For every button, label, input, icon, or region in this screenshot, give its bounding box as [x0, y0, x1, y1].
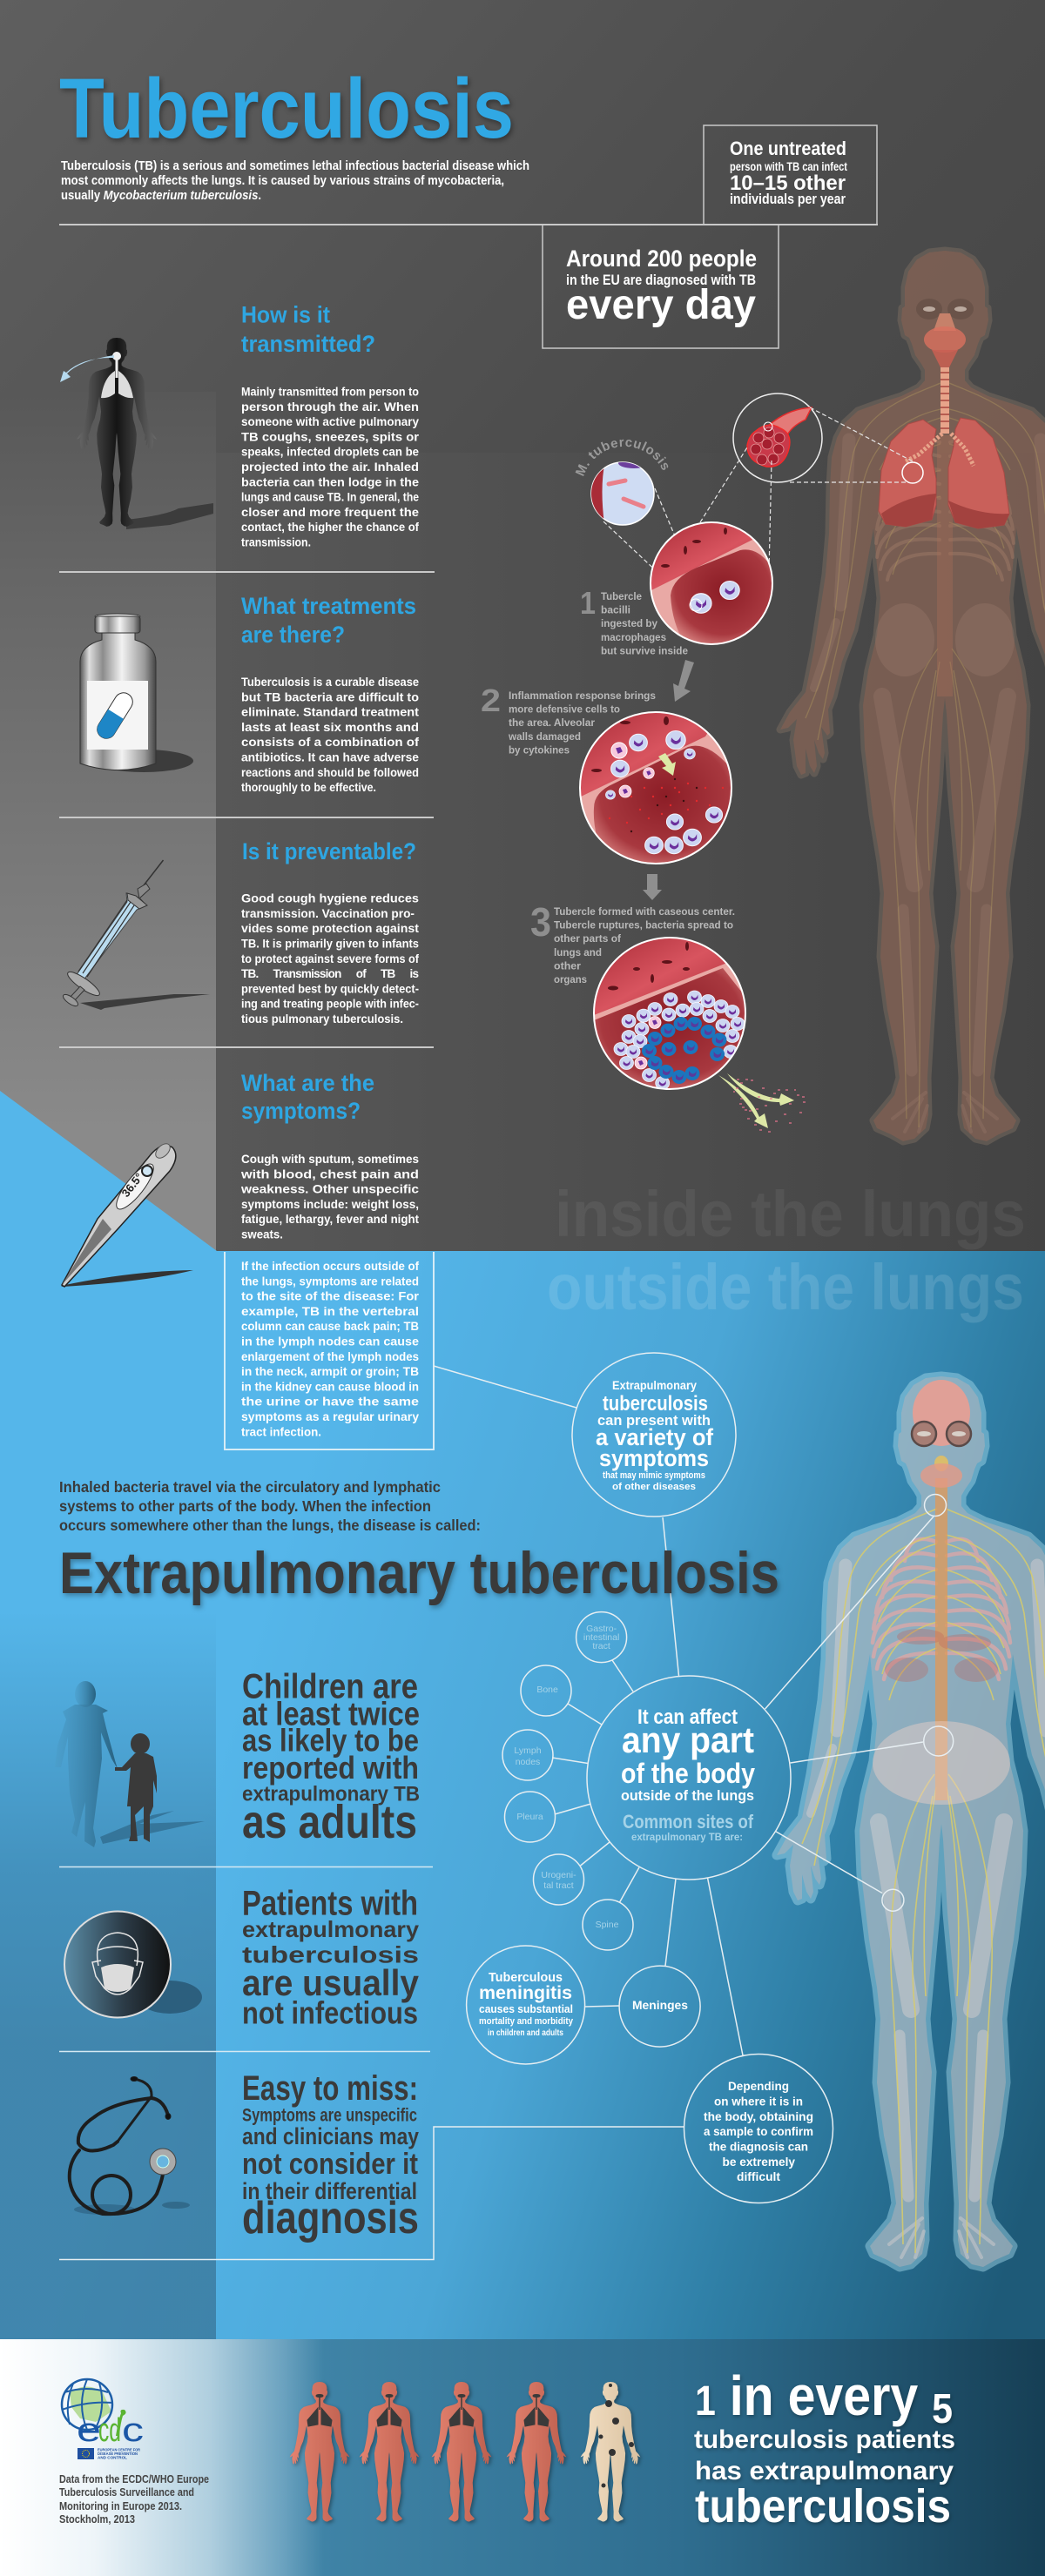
text: easy to miss: and clinicians may	[242, 2123, 419, 2149]
heading: What are the symptoms: What are the	[241, 1070, 374, 1096]
callout: one untreated person	[704, 125, 877, 225]
text: transmission: someone with active pulmonary	[241, 415, 419, 428]
text: prevention	[241, 892, 420, 1026]
mouth	[920, 1463, 962, 1488]
spine	[935, 1478, 947, 1800]
site: gastro-intestinal tract	[576, 1612, 633, 1692]
step 2 illustration	[579, 710, 736, 871]
icon: mother and child	[55, 1681, 205, 1847]
text: prevention: prevented best by quickly detect-	[241, 982, 419, 995]
connector: symptoms to central circle	[663, 1517, 679, 1676]
text: inhaled bacteria: Inhaled bacteria travel via the circulatory and lymphatic	[59, 1478, 441, 1496]
marker: leg	[776, 1832, 904, 1911]
text: prevention: transmission. Vaccination pro-	[241, 907, 415, 920]
step 3 text: other	[554, 961, 582, 972]
text: pulmonary symptoms	[240, 1153, 420, 1241]
panel: extrapulmonary symptoms box: enlargement of the lymph nodes	[241, 1350, 419, 1363]
icon: face mask badge	[64, 1912, 202, 2018]
central circle: any part of the body	[587, 1676, 791, 1880]
step 2 text	[508, 691, 656, 756]
text: transmission: closer and more frequent the	[241, 506, 420, 519]
source text: Data from the ECDC/WHO Europe	[59, 2473, 209, 2485]
source text: Tuberculosis Surveillance and	[59, 2486, 194, 2499]
text: easy to miss: diagnosis	[242, 2193, 419, 2243]
site: urogenital tract: tal tract	[543, 1880, 574, 1891]
text: pulmonary symptoms: fatigue, lethargy, fever and night	[241, 1213, 419, 1226]
skeleton	[814, 440, 1045, 1132]
text: transmission: speaks, infected droplets can be	[241, 446, 419, 459]
step 2 text: Inflammation response brings	[509, 691, 656, 702]
text: prevention: ing and treating people with infec-	[241, 998, 419, 1011]
text: pulmonary symptoms: symptoms include: weight loss,	[241, 1198, 419, 1211]
step 1 number: 1	[580, 585, 596, 621]
text: 1 in every 5: has extrapulmonary	[695, 2457, 954, 2485]
text: pulmonary symptoms: Cough with sputum, sometimes	[241, 1153, 419, 1166]
site: urogenital tract	[533, 1842, 610, 1905]
trachea	[940, 367, 949, 434]
text: inhaled bacteria: occurs somewhere other than the lungs, the disease is called:	[59, 1517, 481, 1534]
panel: extrapulmonary symptoms box: tract infection.	[241, 1425, 321, 1438]
anatomical figure: lungs	[780, 251, 1045, 1141]
panel: extrapulmonary symptoms box: column can cause back pain; TB	[241, 1320, 419, 1333]
text: transmission: lungs and cause TB. In general, the	[241, 491, 419, 504]
nerves	[802, 1509, 1045, 2253]
text: easy to miss: Symptoms are unspecific	[242, 2106, 417, 2126]
step 1 text: macrophages	[601, 633, 666, 643]
source text	[59, 2473, 209, 2526]
callout circle: variety of symptoms: that may mimic symptoms	[603, 1470, 705, 1481]
skeleton	[811, 1565, 1045, 2257]
site: bone: Bone	[536, 1685, 558, 1695]
text: inhaled bacteria: systems to other parts of the body. When the infection	[59, 1497, 431, 1515]
heading: How is it transmitted	[241, 301, 375, 357]
callout circle: tuberculous meningitis: mortality and morbidity	[479, 2016, 574, 2027]
site: meninges	[619, 1879, 700, 2047]
intro text: Tuberculosis (TB) is a serious and sometimes lethal infectious bacterial disease which	[61, 159, 529, 173]
icon: stethoscope	[70, 2077, 190, 2215]
nerves	[806, 383, 1045, 1127]
text: prevention: Good cough hygiene reduces	[241, 892, 419, 905]
step 1 illustration	[649, 522, 775, 649]
site: pleura	[505, 1792, 591, 1842]
text: prevention: TB. Transmission of TB is	[241, 967, 419, 980]
text: children twice as likely: Children are	[242, 1668, 418, 1706]
text: transmission: contact, the higher the chance of	[241, 521, 419, 534]
background: dark right area of upper panel	[216, 453, 1045, 1252]
callout circle: tuberculous meningitis: in children and adults	[488, 2028, 563, 2038]
source text: Stockholm, 2013	[59, 2513, 135, 2526]
text: treatments: reactions and should be followed	[241, 766, 419, 779]
site: spine	[583, 1867, 639, 1950]
connector: rule under easy to miss, to difficulty circle	[59, 2127, 684, 2260]
arrows: bacteria spreading	[718, 1073, 794, 1128]
divider under intro	[59, 224, 878, 225]
heading: Extrapulmonary tuberculosis: Extrapulmonary tuberculosis	[59, 1540, 779, 1606]
panel: extrapulmonary symptoms box: symptoms as a regular urinary	[241, 1410, 419, 1423]
text: treatments: but TB bacteria are difficult to	[241, 690, 419, 703]
step 1 text: Tubercle	[601, 592, 642, 602]
logo: ECDC: AND CONTROL	[98, 2455, 127, 2460]
panel: extrapulmonary symptoms box: in the lymph nodes can cause	[241, 1335, 420, 1348]
figure tissue	[777, 1376, 1045, 2267]
site: meninges: Meninges	[632, 1998, 688, 2012]
heading: What treatments are there: are there?	[241, 622, 345, 648]
text: not infectious: not infectious	[242, 1995, 418, 2030]
callout circle: tuberculous meningitis: Tuberculous	[489, 1970, 563, 1985]
logo: ECDC: c	[122, 2412, 144, 2449]
step 1 text: but survive inside	[601, 646, 688, 656]
text: prevention: to protect against severe forms of	[241, 952, 419, 965]
text: prevention: tious pulmonary tuberculosis.	[241, 1012, 403, 1026]
background: lighter left column	[0, 392, 216, 1252]
site: gastro-intestinal tract: tract	[592, 1641, 610, 1651]
step 1 text: bacilli	[601, 606, 630, 616]
text: treatments: Tuberculosis is a curable disease	[241, 676, 419, 689]
pictogram: five body figures	[290, 2382, 640, 2522]
step 3 illustration	[592, 937, 749, 1097]
face detail	[916, 299, 974, 367]
anatomical figure: nervous system	[777, 1376, 1045, 2267]
step 2 text: walls damaged	[508, 732, 581, 743]
icon: thermometer: 36.5°	[119, 1171, 145, 1200]
figure tissue	[780, 251, 1045, 1141]
callout circle: tuberculous meningitis	[467, 1946, 619, 2064]
text: transmission: transmission.	[241, 536, 311, 548]
text: treatments: consists of a combination of	[241, 736, 420, 749]
text: not infectious: Patients with	[242, 1884, 418, 1922]
text: transmission	[241, 385, 420, 548]
background: footer band	[0, 2339, 1045, 2576]
heading: How is it transmitted: How is it	[241, 301, 330, 327]
text: easy to miss	[242, 2069, 419, 2243]
text: transmission: bacteria can then lodge in the	[241, 475, 420, 488]
left lung	[879, 420, 936, 527]
step 2 number: 2	[481, 683, 501, 718]
callout: one untreated person: One untreated	[730, 138, 846, 159]
ribs	[876, 440, 1014, 580]
ribs	[873, 1539, 1010, 1679]
text: transmission: TB coughs, sneezes, spits or	[241, 430, 420, 443]
text: inhaled bacteria	[59, 1478, 481, 1534]
callout: 200 people every day: Around 200 people	[566, 245, 757, 272]
callout: 200 people every day: in the EU are diagnosed with TB	[566, 272, 756, 288]
heading: Is it preventable: Is it preventable?	[242, 838, 416, 864]
text: children twice as likely: as adults	[242, 1796, 417, 1848]
callout circle: tuberculous meningitis: causes substantial	[479, 2002, 573, 2015]
step 3 text: organs	[554, 975, 587, 985]
nose	[934, 1456, 948, 1471]
site: lymph nodes: nodes	[516, 1757, 540, 1767]
step 3 text: Tubercle ruptures, bacteria spread to	[554, 921, 733, 932]
text: not infectious	[242, 1884, 420, 2030]
step 3 text: lungs and	[554, 948, 602, 958]
text: easy to miss: in their differential	[242, 2178, 417, 2204]
heading: What are the symptoms	[241, 1070, 374, 1124]
pelvis	[873, 1721, 1010, 1805]
panel: extrapulmonary symptoms box: example, TB in the vertebral	[241, 1305, 419, 1318]
marker: neck	[765, 1494, 946, 1709]
central circle: any part of the body: outside of the lungs	[621, 1787, 754, 1804]
panel: extrapulmonary symptoms box: in the neck, armpit or groin; TB	[241, 1365, 419, 1378]
panel: extrapulmonary symptoms box: in the kidney can cause blood in	[241, 1380, 419, 1393]
callout circle: diagnosis difficult: be extremely	[723, 2156, 795, 2169]
text: not infectious: are usually	[242, 1962, 420, 2003]
pictogram: dark lungs in four figures	[307, 2394, 549, 2426]
logo: ECDC: e	[77, 2412, 101, 2449]
text: not infectious: tuberculosis	[242, 1942, 419, 1968]
callout: 200 people every day	[543, 225, 779, 348]
text: not infectious: extrapulmonary	[242, 1916, 420, 1942]
logo: ECDC	[62, 2379, 144, 2460]
text: children twice as likely: reported with	[242, 1750, 419, 1786]
panel: extrapulmonary symptoms box: the lungs, symptoms are related	[241, 1275, 419, 1288]
callout circle: variety of symptoms: can present with	[597, 1412, 711, 1429]
intro text	[61, 159, 529, 203]
callout circle: variety of symptoms: of other diseases	[612, 1482, 696, 1492]
logo: ECDC: EUROPEAN CENTRE FOR	[98, 2448, 141, 2452]
text: treatments: eliminate. Standard treatment	[241, 706, 420, 719]
text: 1 in every 5	[694, 2364, 955, 2532]
callout: one untreated person: individuals per year	[730, 191, 846, 207]
callout circle: variety of symptoms: Extrapulmonary	[612, 1378, 697, 1392]
step 2 text: by cytokines	[509, 745, 570, 756]
text: pulmonary symptoms: sweats.	[241, 1227, 283, 1241]
background: dark upper panel	[0, 0, 1045, 1252]
text: 1 in every 5: tuberculosis patients	[694, 2425, 955, 2454]
text: children twice as likely	[242, 1668, 420, 1848]
callout circle: variety of symptoms: a variety of	[596, 1424, 714, 1450]
text: transmission: projected into the air. Inhaled	[241, 461, 419, 474]
site: gastro-intestinal tract: Gastro-	[586, 1624, 617, 1634]
dashed zoom lines	[603, 407, 913, 603]
background label: inside the lungs: inside the lungs	[555, 1178, 1026, 1250]
text: pulmonary symptoms: with blood, chest pain and	[240, 1167, 419, 1180]
heading: What treatments are there	[241, 593, 416, 648]
central circle: any part of the body: any part	[622, 1719, 754, 1760]
step 3 text: Tubercle formed with caseous center.	[554, 907, 735, 918]
text: pulmonary symptoms: weakness. Other unspecific	[240, 1183, 420, 1196]
text: treatments: antibiotics. It can have adverse	[241, 750, 419, 764]
text: treatments: thoroughly to be effective.	[241, 781, 376, 794]
callout: one untreated person: person with TB can infect	[730, 159, 847, 173]
lung marker circle	[902, 462, 923, 483]
text: treatments: lasts at least six months and	[241, 721, 419, 734]
organs	[885, 1629, 998, 1682]
bronchi	[906, 434, 974, 466]
icon: coughing person	[60, 338, 213, 529]
text: transmission: person through the air. When	[241, 400, 419, 414]
pelvis	[875, 603, 1015, 676]
intro text: most commonly affects the lungs. It is caused by various strains of mycobacteria,	[61, 174, 504, 188]
text: 1 in every 5: 5	[932, 2386, 953, 2432]
heading: What are the symptoms: symptoms?	[241, 1098, 361, 1124]
panel: extrapulmonary symptoms box: If the infection occurs outside of	[241, 1260, 419, 1273]
arrow: step 2 to 3	[643, 874, 662, 900]
step 3 number: 3	[530, 899, 551, 945]
step 3 text: other parts of	[554, 934, 621, 945]
callout circle: diagnosis difficult	[684, 1878, 833, 2203]
icon: thermometer	[61, 1141, 193, 1287]
callout circle: diagnosis difficult: the body, obtaining	[704, 2110, 813, 2123]
marker: abdomen	[791, 1726, 954, 1763]
logo: ECDC: DISEASE PREVENTION	[98, 2452, 138, 2456]
central circle: any part of the body: extrapulmonary TB are:	[631, 1831, 743, 1843]
source text: Monitoring in Europe 2013.	[59, 2500, 182, 2512]
callout circle: diagnosis difficult: the diagnosis can	[709, 2140, 808, 2154]
step 1 text	[601, 592, 688, 656]
callout circle: variety of symptoms: tuberculosis	[603, 1392, 708, 1416]
M. tuberculosis circle	[575, 439, 669, 526]
site: lymph nodes	[502, 1730, 588, 1780]
brain	[913, 1380, 970, 1446]
background: darker left column in blue panel	[0, 1611, 216, 2339]
step 2 text: more defensive cells to	[509, 705, 620, 716]
central circle: any part of the body: Common sites of	[623, 1811, 754, 1833]
central circle: any part of the body: of the body	[621, 1758, 755, 1789]
right lung	[948, 418, 1009, 528]
heading: What treatments are there: What treatments	[241, 593, 416, 619]
intro text: usually Mycobacterium tuberculosis.	[61, 189, 261, 203]
central circle: any part of the body: It can affect	[637, 1705, 738, 1729]
arrow: step 1 to 2	[673, 660, 694, 702]
logo: ECDC: cd	[98, 2412, 121, 2449]
step 2 text: the area. Alveolar	[509, 718, 596, 729]
text: children twice as likely: at least twice	[242, 1697, 420, 1733]
callout circle: alveoli	[733, 393, 822, 482]
callout: one untreated person: 10–15 other	[730, 172, 846, 195]
text: children twice as likely: as likely to be	[242, 1723, 419, 1759]
callout circle: diagnosis difficult: on where it is in	[714, 2095, 803, 2109]
text: prevention: vides some protection against	[241, 922, 420, 935]
text: 1 in every 5: tuberculosis	[695, 2480, 951, 2532]
step 3 text	[554, 907, 735, 985]
pictogram: extrapulmonary spots	[599, 2384, 634, 2488]
callout circle: diagnosis difficult: a sample to confirm	[704, 2125, 813, 2138]
text: easy to miss: not consider it	[242, 2148, 418, 2181]
title: Tuberculosis	[59, 61, 514, 156]
callout circle: diagnosis difficult: difficult	[737, 2170, 781, 2183]
site: pleura: Pleura	[516, 1812, 543, 1822]
panel: extrapulmonary symptoms box: to the site of the disease: For	[241, 1290, 420, 1303]
site: spine: Spine	[596, 1920, 619, 1930]
M. tuberculosis circle: M. tuberculosis	[575, 439, 669, 476]
bacteria dashes	[733, 1079, 806, 1132]
text: treatments	[241, 676, 420, 794]
background: blue lower panel	[0, 1091, 1045, 2339]
callout circle: diagnosis difficult: Depending	[728, 2080, 789, 2093]
figure silhouette outer	[777, 1376, 1045, 2267]
callout circle: tuberculous meningitis: meningitis	[479, 1983, 572, 2003]
site: gastro-intestinal tract: intestinal	[583, 1632, 619, 1643]
callout circle: variety of symptoms: symptoms	[599, 1445, 709, 1471]
text: 1 in every 5: 1 in every	[695, 2364, 942, 2427]
site: urogenital tract: Urogeni-	[541, 1870, 576, 1880]
text: children twice as likely: extrapulmonary TB	[242, 1782, 420, 1806]
site: lymph nodes: Lymph	[514, 1745, 542, 1756]
step 1 text: ingested by	[601, 619, 658, 629]
heading: How is it transmitted: transmitted?	[241, 331, 375, 357]
callout circle: variety of symptoms	[434, 1353, 736, 1517]
figure silhouette outer	[780, 251, 1045, 1141]
text: transmission: Mainly transmitted from person to	[241, 385, 419, 399]
spine column	[937, 435, 953, 696]
icon: medicine bottle	[80, 614, 193, 772]
callout: 200 people every day: every day	[566, 282, 756, 328]
text: prevention: TB. It is primarily given to infants	[241, 937, 419, 951]
text: easy to miss: Easy to miss:	[242, 2069, 418, 2108]
eye sockets	[912, 1422, 971, 1446]
panel: extrapulmonary symptoms box: the urine or have the same	[241, 1396, 420, 1409]
panel: extrapulmonary symptoms box	[225, 1252, 434, 1449]
icon: syringe	[62, 860, 210, 1010]
site: bone	[521, 1665, 602, 1725]
